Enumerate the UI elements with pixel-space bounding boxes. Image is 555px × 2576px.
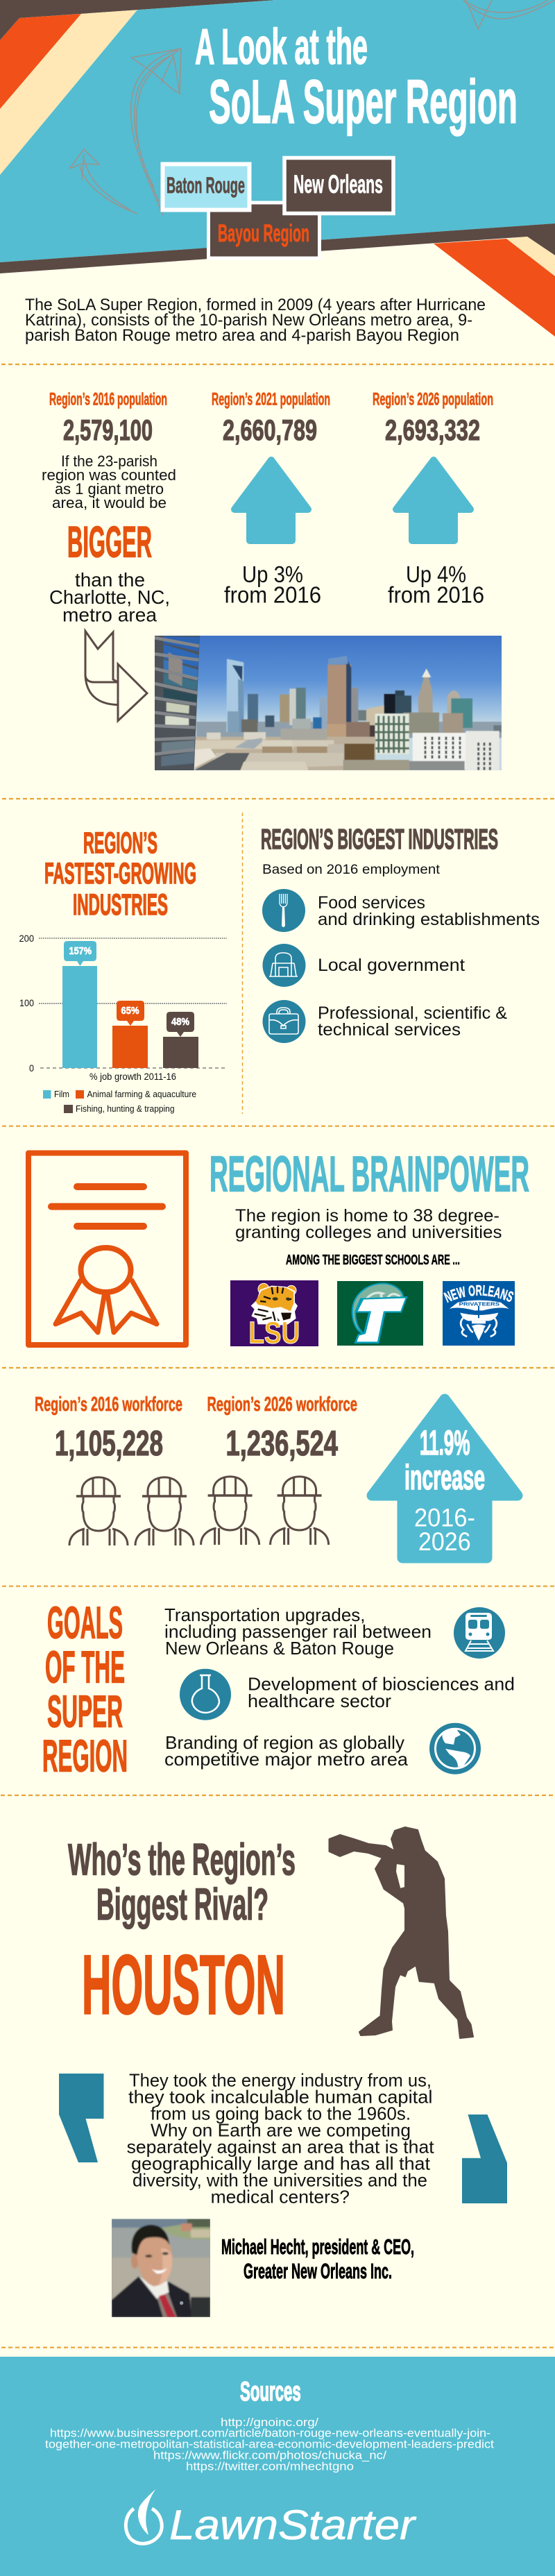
bar chart: 100 <box>19 997 34 1008</box>
column: 2026 workforce: 1,236,524 <box>226 1423 338 1463</box>
quote text: geographically large and has all that <box>131 2153 431 2174</box>
logo: New Orleans Privateers: PRIVATEERS <box>459 1300 500 1307</box>
icon: opening quote mark <box>59 2074 104 2162</box>
sources list <box>45 2416 494 2473</box>
logo: New Orleans Privateers <box>443 1281 515 1346</box>
sources list: https://www.businessreport.com/article/baton-rouge-new-orleans-eventually-join- <box>50 2427 490 2440</box>
sketch arrow: small <box>69 149 137 214</box>
population column: 2026: 2,693,332 <box>385 414 480 446</box>
sources list: https://twitter.com/mhechtgno <box>186 2460 354 2473</box>
subheading: Based on 2016 employment <box>262 863 441 877</box>
panel: goals: REGION <box>42 1731 128 1781</box>
subheading: AMONG THE BIGGEST SCHOOLS ARE ... <box>286 1253 460 1268</box>
up arrow <box>396 460 470 541</box>
quote text <box>127 2070 434 2208</box>
icon: globe <box>429 1723 481 1774</box>
box: Bayou Region <box>208 203 319 258</box>
text: professional services <box>318 1003 507 1040</box>
sources heading: Sources <box>240 2377 301 2407</box>
goal: transportation: Transportation upgrades, <box>164 1604 365 1625</box>
icon: workers <box>69 1477 329 1545</box>
population column: 2016: Region’s 2016 population <box>49 390 167 409</box>
icon: fork <box>262 889 305 932</box>
sources list: http://gnoinc.org/ <box>221 2416 318 2429</box>
callout arrow: 11.9% increase: 2016- <box>414 1504 475 1532</box>
school logos <box>230 1280 515 1350</box>
column: 2016 workforce: Region’s 2016 workforce <box>35 1393 182 1416</box>
bar chart: 200 <box>19 933 34 944</box>
quote attribution: Michael Hecht, president & CEO, <box>221 2235 414 2259</box>
box: Baton Rouge <box>162 164 250 210</box>
goal: biosciences <box>248 1674 515 1711</box>
icon: boxer silhouette <box>329 1827 473 2038</box>
population column: 2021: from 2016 <box>224 582 321 608</box>
callout: 48% <box>166 1012 194 1037</box>
callout: 65% <box>117 1001 144 1026</box>
text: food services: Food services <box>318 893 425 913</box>
quote text: separately against an area that is that <box>127 2137 434 2158</box>
text: food services <box>318 893 540 929</box>
icon: diploma certificate <box>28 1153 186 1345</box>
column: 2016 workforce: 1,105,228 <box>55 1423 163 1463</box>
column: 2016 workforce <box>35 1393 182 1463</box>
icon: briefcase <box>262 1000 305 1043</box>
bar chart: 0 <box>29 1062 34 1074</box>
panel: goals <box>42 1598 515 1781</box>
text: local government: Local government <box>318 956 465 975</box>
goal: transportation: New Orleans & Baton Rouge <box>165 1638 394 1659</box>
quote text: They took the energy industry from us, <box>129 2070 432 2091</box>
sources list: https://www.flickr.com/photos/chucka_nc/ <box>153 2449 386 2462</box>
text block: granting colleges and universities <box>235 1223 502 1242</box>
logo: LawnStarter <box>126 2489 416 2548</box>
legend <box>43 1089 196 1114</box>
quote text: they took incalculable human capital <box>128 2087 433 2108</box>
text: professional services: Professional, scientific & <box>318 1003 507 1023</box>
goal: transportation <box>164 1604 432 1659</box>
goal: biosciences: Development of biosciences and <box>248 1674 515 1695</box>
population column: 2016: 2,579,100 <box>63 414 153 446</box>
population column: 2026 <box>373 390 493 608</box>
heading: INDUSTRIES <box>73 888 168 922</box>
box: New Orleans: New Orleans <box>293 170 383 198</box>
heading: SUPER <box>47 1686 123 1737</box>
population column: 2016: metro area <box>62 604 157 626</box>
icon: train <box>454 1607 505 1659</box>
intro paragraph: The SoLA Super Region, formed in 2009 (4 years after Hurricane <box>25 296 486 314</box>
goal: branding <box>164 1732 409 1770</box>
ribbon arrow to photo <box>85 631 147 721</box>
callout: 157%: 157% <box>69 945 92 957</box>
logo: LSU: LSU <box>248 1316 300 1350</box>
quote <box>59 2070 507 2208</box>
sources list: together-one-metropolitan-statistical-area-economic-development-leaders-predict <box>45 2438 494 2451</box>
panel: biggest industries <box>261 823 540 1043</box>
heading <box>42 1598 128 1781</box>
population column: 2016 <box>42 390 176 626</box>
intro paragraph: parish Baton Rouge metro area and 4-parish Bayou Region <box>25 326 459 345</box>
callout: 48%: 48% <box>171 1016 189 1028</box>
text block: The region is home to 38 degree- <box>235 1206 500 1226</box>
header banner <box>0 0 555 337</box>
footer <box>0 2357 555 2576</box>
population column: 2016: than the <box>75 569 145 591</box>
sketch arrow: top right <box>463 0 555 29</box>
callout: 65%: 65% <box>121 1005 139 1017</box>
population column: 2016: as 1 giant metro <box>55 480 164 498</box>
up arrow <box>234 460 308 541</box>
goal: branding: Branding of region as globally <box>165 1732 404 1753</box>
legend: Film <box>54 1089 69 1099</box>
heading <box>44 827 196 922</box>
heading: FASTEST-GROWING <box>44 857 196 890</box>
panel: workforce <box>35 1393 518 1558</box>
sketch arrow: large <box>130 49 181 215</box>
population column: 2026: from 2016 <box>388 582 484 608</box>
icon: government building <box>262 944 305 987</box>
logo: LSU <box>230 1280 318 1350</box>
callout arrow: 11.9% increase: 2026 <box>418 1527 471 1556</box>
title: A Look at the <box>195 19 368 75</box>
legend: Fishing, hunting & trapping <box>76 1103 175 1114</box>
quote text: Why on Earth are we competing <box>151 2120 411 2141</box>
panel: fastest-growing industries <box>19 827 227 1114</box>
population column: 2016: area, it would be <box>52 494 166 511</box>
panel: regional brainpower <box>210 1147 529 1350</box>
population column: 2021 <box>212 390 330 608</box>
column: 2026 workforce: Region’s 2026 workforce <box>207 1393 357 1416</box>
box: New Orleans <box>284 158 393 214</box>
legend: Animal farming & aquaculture <box>87 1089 196 1099</box>
population column: 2016: BIGGER <box>67 518 152 566</box>
text: food services: and drinking establishments <box>318 910 540 929</box>
population column: 2016: Charlotte, NC, <box>49 586 170 608</box>
panel: goals: OF THE <box>45 1642 125 1693</box>
title <box>195 19 518 136</box>
population column: 2026: Up 4% <box>406 561 466 587</box>
icon: flask <box>180 1669 231 1720</box>
quote text: medical centers? <box>211 2187 350 2208</box>
callout arrow: 11.9% increase: 11.9% <box>420 1423 470 1462</box>
bar chart: % job growth 2011-16 <box>89 1071 176 1082</box>
text: HOUSTON <box>82 1938 285 2032</box>
population column: 2021: Up 3% <box>242 561 303 587</box>
text: professional services: technical services <box>318 1020 461 1040</box>
heading: who's the rival: Biggest Rival? <box>96 1879 268 1929</box>
quote attribution: Greater New Orleans Inc. <box>244 2259 392 2283</box>
population column: 2016: region was counted <box>42 466 176 484</box>
goal: biosciences: healthcare sector <box>248 1690 391 1711</box>
intro paragraph <box>25 296 486 345</box>
quote text: from us going back to the 1960s. <box>151 2103 411 2124</box>
column: 2026 workforce <box>207 1393 357 1463</box>
box: Baton Rouge: Baton Rouge <box>166 173 245 198</box>
goal: transportation: including passenger rail between <box>164 1621 432 1642</box>
population column: 2021: Region’s 2021 population <box>212 390 330 409</box>
intro paragraph: Katrina), consists of the 10-parish New Orleans metro area, 9- <box>25 311 472 330</box>
text block <box>235 1206 502 1242</box>
photo: Charlotte skyline <box>155 636 502 770</box>
population column: 2016: If the 23-parish <box>61 452 157 470</box>
icon: closing quote mark <box>462 2115 507 2203</box>
heading: who's the rival: Who’s the Region’s <box>68 1835 296 1885</box>
heading: GOALS <box>47 1598 123 1648</box>
quote attribution <box>221 2235 414 2283</box>
callout: 157% <box>64 941 96 966</box>
box: Bayou Region: Bayou Region <box>218 220 309 247</box>
photo: Michael Hecht portrait <box>112 2219 210 2317</box>
logo: Tulane <box>337 1281 423 1346</box>
callout arrow: 11.9% increase: increase <box>404 1458 485 1497</box>
bar chart <box>19 933 227 1082</box>
logo: LawnStarter: LawnStarter <box>169 2502 416 2548</box>
quote text: diversity, with the universities and the <box>133 2170 427 2191</box>
heading: who's the rival <box>68 1835 296 1929</box>
goal: branding: competitive major metro area <box>164 1749 409 1770</box>
callout arrow: 11.9% increase <box>372 1399 518 1558</box>
heading: REGION’S <box>83 827 157 860</box>
population column: 2021: 2,660,789 <box>223 414 317 446</box>
